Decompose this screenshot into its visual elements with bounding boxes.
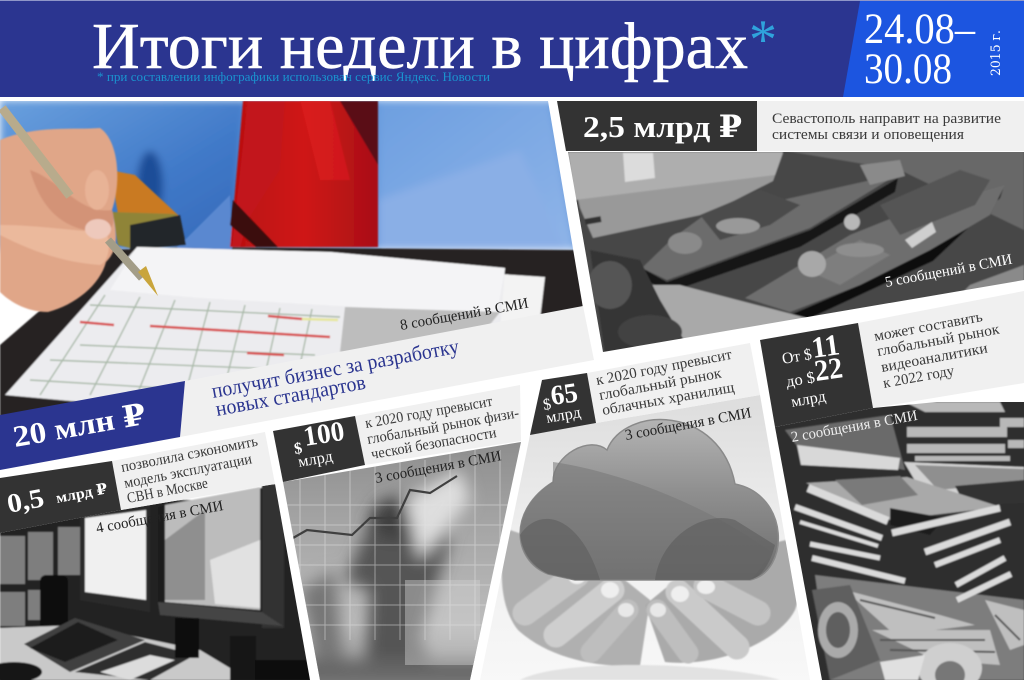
description: physical security market: к 2020 году превысит [364,394,494,432]
mentions count: 8 сообщений в СМИ [399,296,530,334]
description: physical security market: глобальный рынок физи- [366,405,520,448]
amount: 11 to 22 billion dollars: От $ [781,346,813,368]
photo: hand signing document [0,100,590,420]
description: Sevastopol [772,111,1001,143]
amount: 100 billion dollars: млрд [297,448,334,471]
date block background [843,1,1024,97]
photo: cloud in hands [475,390,815,680]
header: dark amount box [273,416,365,482]
amount: 11 to 22 billion dollars: до $ [785,369,816,391]
icon: cloud [520,420,778,580]
amount: 11 to 22 billion dollars: 22 [812,351,845,388]
panel: header [0,0,1024,97]
icon: hand [0,128,117,312]
panel: 20 million rubles [0,100,594,470]
header: dark amount box [760,323,873,427]
amount: 0.5 billion rubles: 0,5 [4,482,46,519]
header: dark amount box [557,101,757,151]
photo: growth chart [280,440,525,680]
title asterisk: * [749,9,777,71]
header: light strip [112,432,275,510]
panel: 100 billion dollars [273,385,525,680]
header: light strip [757,101,1024,151]
description: cloud storage market: облачных хранилищ [601,380,736,419]
description: video analytics market: может составить [873,309,984,345]
photo: stacks of money [770,400,1024,680]
title: Итоги недели в цифрах [92,10,748,83]
mentions count: 5 сообщений в СМИ [884,252,1014,291]
amount: 65 billion dollars: 65 [549,377,580,412]
photo: surveillance monitors [0,484,320,680]
description: CCTV savings: модель эксплуатации [123,451,253,492]
description: Sevastopol: системы связи и оповещения [772,127,964,143]
date range: 30.08 [864,46,952,93]
description: cloud storage market: к 2020 году превысит [595,347,734,389]
date range [864,6,975,93]
panel: 11 to 22 billion dollars [760,291,1024,680]
description: cloud storage market: глобальный рынок [598,365,723,404]
photo: warships [560,150,1024,360]
amount: 11 to 22 billion dollars [781,328,845,411]
panel: 0.5 billion rubles [0,432,320,680]
amount: 100 billion dollars [293,416,347,471]
amount: 11 to 22 billion dollars: млрд [790,388,827,411]
icon: pen [2,108,158,296]
amount: 0.5 billion rubles [4,481,109,519]
description: physical security market: ческой безопасности [370,425,498,463]
header: light strip [587,343,760,423]
year: 2015 г. [989,30,1004,76]
amount: 65 billion dollars [542,377,582,427]
description: physical security market [364,394,520,463]
amount: 20 million rubles: 20 млн ₽ [10,398,148,454]
band: blue amount box [0,381,185,470]
header: dark amount box [0,461,121,533]
description: CCTV savings: позволила сэкономить [120,434,259,476]
amount: 100 billion dollars: $ [293,440,304,458]
amount: 0.5 billion rubles: млрд ₽ [55,481,109,507]
description: new standards: новых стандартов [214,370,367,421]
description: cloud storage market [595,347,736,419]
description: video analytics market [873,309,1001,392]
description: Sevastopol: Севастополь направит на развитие [772,111,1001,127]
mentions count: 2 сообщения в СМИ [790,408,919,446]
mentions count: 4 сообщения в СМИ [95,498,225,537]
description: new standards: получит бизнес за разработку [210,334,461,403]
mentions count: 3 сообщения в СМИ [624,405,753,444]
amount: 11 to 22 billion dollars: 11 [809,328,842,365]
header: light strip [858,291,1024,408]
panel: 2.5 billion rubles [557,101,1024,360]
amount: 65 billion dollars: $ [542,396,553,414]
source footnote: * при составлении инфографики использован сервис Яндекс. Новости [97,69,490,84]
date range: 24.08– [864,6,975,53]
panel: 65 billion dollars [475,343,815,680]
amount: 65 billion dollars: млрд [545,404,582,427]
description: CCTV savings [120,434,259,507]
header: dark amount box [530,373,596,435]
mentions count: 3 сообщения в СМИ [374,448,503,487]
amount: 2.5 billion rubles: 2,5 млрд ₽ [583,109,742,144]
amount: 100 billion dollars: 100 [301,416,347,453]
description: video analytics market: к 2022 году [882,363,956,392]
description: video analytics market: глобальный рынок [876,321,1001,360]
band: light text strip [180,306,594,437]
description: video analytics market: видеоаналитики [880,341,989,376]
header: light strip [355,385,521,465]
description: CCTV savings: СВН в Москве [126,476,210,507]
